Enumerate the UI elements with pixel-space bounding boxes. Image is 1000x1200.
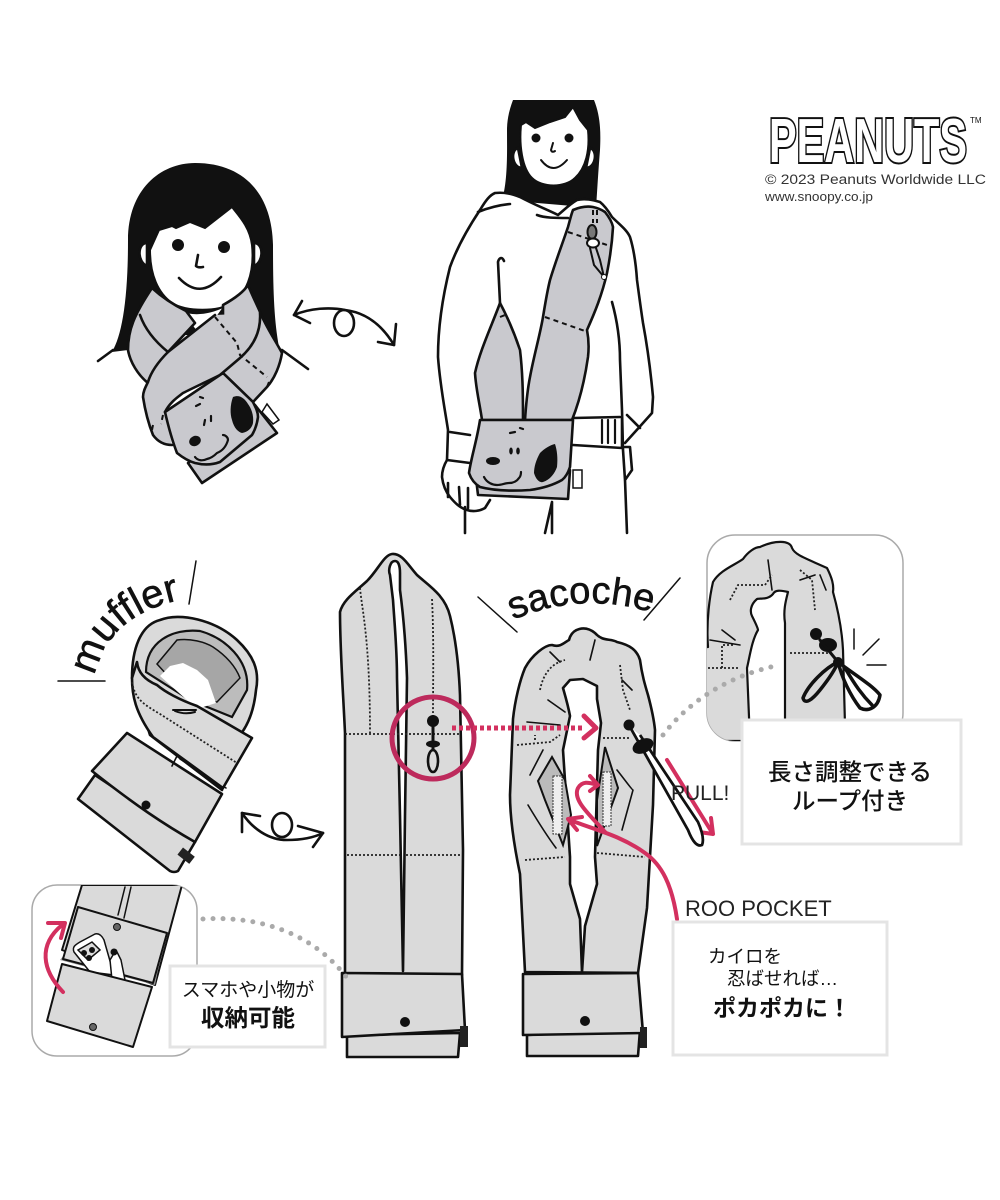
logo: PEANUTS (764, 106, 986, 204)
heading: muffler: muffler (74, 579, 176, 674)
callout: storage text (170, 966, 325, 1047)
arrow: between muffler and sacoche figures (294, 301, 396, 345)
callout: warm pocket text: 忍ばせれば… (727, 968, 838, 989)
label: ROO POCKET: ROO POCKET (685, 896, 832, 921)
connector: toggle to loop inset (663, 665, 780, 735)
callout: warm pocket text (673, 922, 887, 1055)
inset: adjustable loop (700, 535, 903, 741)
callout: adjustable loop text (742, 720, 961, 844)
illustration: scarf worn as muffler (78, 617, 257, 872)
illustration: flat scarf (340, 554, 468, 1057)
callout: warm pocket text: カイロを (708, 946, 782, 967)
heading: sacoche: sacoche (508, 576, 654, 618)
callout: storage text: スマホや小物が (182, 979, 314, 1001)
heading: sacoche (477, 576, 681, 633)
logo: PEANUTS: TM (970, 116, 982, 125)
logo: PEANUTS: © 2023 Peanuts Worldwide LLC (765, 172, 986, 187)
logo: PEANUTS: PEANUTS (769, 106, 967, 176)
callout: adjustable loop text: 長さ調整できる (768, 759, 932, 785)
figure: woman wearing sacoche (438, 100, 653, 533)
loop toggle with pull arrow: PULL! (671, 782, 729, 805)
figure: woman wearing muffler (98, 163, 308, 483)
inset: phone in pocket (32, 885, 197, 1056)
callout: toggle circle and dotted arrow (392, 697, 596, 779)
arrow: muffler to flat scarf (242, 813, 323, 847)
illustration: gathered sacoche scarf (510, 629, 655, 1056)
loop toggle with pull arrow (624, 720, 729, 845)
arrows: roo pocket indicators (568, 776, 677, 919)
callout: storage text: 収納可能 (201, 1005, 295, 1031)
callout: adjustable loop text: ループ付き (792, 788, 908, 814)
connector: inset to scarf pocket (203, 919, 350, 982)
logo: PEANUTS: www.snoopy.co.jp (764, 190, 873, 204)
callout: warm pocket text: ポカポカに！ (713, 995, 851, 1021)
